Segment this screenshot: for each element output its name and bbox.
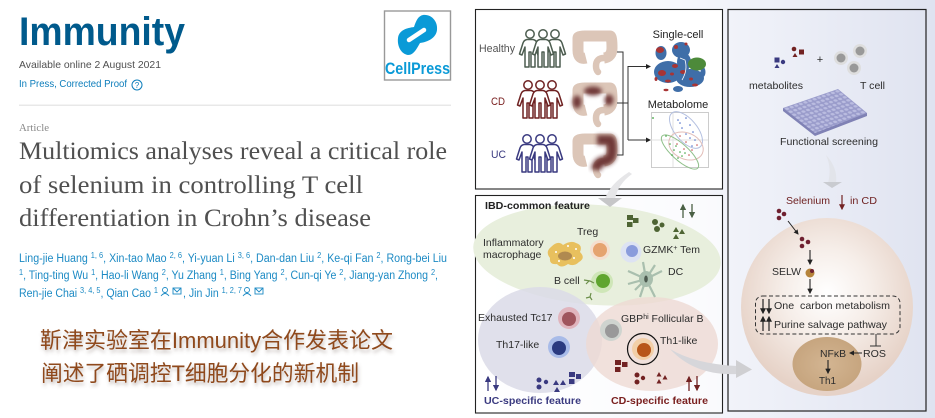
author list: 1, 6 bbox=[91, 251, 104, 260]
cell: Th17-like bbox=[496, 336, 570, 358]
region: IBD-common bbox=[470, 196, 724, 314]
region: UC-specific bbox=[478, 287, 602, 393]
author list: , Jin Jin bbox=[183, 288, 222, 300]
author list: , Jiang-yan Zhong bbox=[343, 270, 431, 282]
author list: 2 bbox=[280, 268, 285, 277]
panel: feature overlap bbox=[470, 196, 724, 413]
label: T cell: T cell bbox=[860, 80, 885, 92]
arrow: Th1 to mechanism bbox=[670, 349, 752, 378]
IBD metabolite symbols bbox=[627, 215, 685, 239]
selenium label: in CD bbox=[850, 195, 877, 207]
well plate bbox=[783, 89, 867, 136]
author list: , Rong-bei Liu bbox=[381, 253, 447, 265]
arrow: screening down bbox=[823, 155, 842, 188]
SELW: SELW bbox=[772, 266, 801, 278]
plus: + bbox=[817, 54, 823, 66]
heading: UC-specific: UC-specific feature bbox=[484, 395, 581, 407]
arrow: SELW down bbox=[809, 279, 811, 293]
arrow: NFkB to Th1 bbox=[827, 360, 829, 373]
Chinese headline bbox=[40, 328, 393, 386]
cell body bbox=[741, 218, 913, 396]
author list: 2, 6 bbox=[170, 251, 182, 260]
CellPress logo: CellPress bbox=[385, 59, 450, 78]
author list: 1 bbox=[220, 268, 224, 277]
selenium label bbox=[786, 195, 877, 209]
ROS: ROS bbox=[863, 348, 886, 360]
cell: inflammatory macrophage bbox=[483, 237, 583, 266]
article header bbox=[19, 10, 186, 90]
metabolic pathways box: Purine salvage pathway bbox=[774, 319, 888, 331]
cell: exhausted Tc17 bbox=[478, 307, 580, 329]
arrow: ROS to NFkB bbox=[850, 352, 862, 354]
bracket arrows bbox=[617, 52, 650, 155]
author list: 3, 4, 5 bbox=[80, 286, 101, 295]
article title: Multiomics analyses reveal a critical role bbox=[19, 138, 447, 165]
region: CD-specific bbox=[586, 297, 718, 391]
cell: Th17-like: Th17-like bbox=[496, 339, 539, 351]
author list: , Cun-qi Ye bbox=[285, 270, 339, 282]
single-cell map bbox=[653, 29, 706, 92]
metabolic pathways box: One carbon metabolism bbox=[774, 300, 890, 312]
author list: , Ke-qi Fan bbox=[321, 253, 376, 265]
nucleus bbox=[792, 337, 862, 391]
cell: dendritic bbox=[628, 262, 684, 297]
metabolite symbols bbox=[774, 47, 804, 68]
cell: Treg: Treg bbox=[577, 226, 598, 238]
author list bbox=[19, 251, 447, 300]
author list: 2 bbox=[339, 268, 344, 277]
cell: GBP follicular B: hi bbox=[643, 314, 649, 321]
selenium entering cell bbox=[777, 209, 810, 264]
SELW bbox=[772, 266, 814, 278]
cell: inflammatory macrophage: Inflammatory bbox=[483, 237, 544, 249]
author list: 1, 2, 7 bbox=[222, 286, 242, 295]
cell: Th1-like: Th1-like bbox=[660, 335, 698, 347]
cell: GZMK Tem: GZMK bbox=[643, 244, 673, 256]
Healthy row: Healthy bbox=[479, 43, 515, 55]
metabolome plot: Metabolome bbox=[648, 99, 708, 111]
UC metabolite symbols bbox=[536, 372, 581, 392]
cell: GZMK Tem: + bbox=[673, 245, 677, 252]
cell: exhausted Tc17: Exhausted Tc17 bbox=[478, 312, 553, 324]
cell: Th1-like bbox=[628, 334, 698, 364]
UC arrows bbox=[488, 376, 496, 391]
status link: In Press, Corrected Proof bbox=[19, 78, 127, 90]
author list: Ren-jie Chai bbox=[19, 288, 82, 300]
inhibition bar bbox=[870, 334, 881, 346]
author list: , Ting-ting Wu bbox=[23, 270, 91, 282]
author list: , Xin-tao Mao bbox=[103, 253, 170, 265]
cell: B cell bbox=[554, 271, 613, 300]
Th1: Th1 bbox=[819, 375, 836, 387]
label: functional screening: Functional screening bbox=[780, 136, 878, 148]
cell: GBP follicular B: GBP bbox=[621, 313, 643, 325]
publication date: Available online 2 August 2021 bbox=[19, 59, 161, 71]
cell: GBP follicular B: Follicular B bbox=[649, 313, 704, 325]
author list: 1 bbox=[154, 286, 159, 295]
author list: 1 bbox=[91, 268, 96, 277]
T cell icons bbox=[834, 44, 867, 75]
single-cell map: Single-cell bbox=[653, 29, 703, 41]
cell: GBP follicular B bbox=[600, 313, 704, 341]
article type: Article bbox=[19, 123, 49, 134]
CD row bbox=[491, 81, 614, 124]
journal title: Immunity bbox=[19, 10, 186, 54]
author list: 2 bbox=[431, 268, 436, 277]
article title: of selenium in controlling T cell bbox=[19, 172, 363, 199]
heading: IBD-common: IBD-common feature bbox=[485, 200, 590, 212]
cell: Treg bbox=[577, 226, 610, 260]
Healthy row bbox=[479, 30, 612, 72]
cell: inflammatory macrophage: macrophage bbox=[483, 249, 542, 261]
metabolome plot bbox=[648, 99, 709, 174]
label: metabolites: metabolites bbox=[749, 80, 803, 92]
NFkB: NFκB bbox=[820, 348, 846, 360]
article title bbox=[19, 138, 447, 232]
CD metabolite symbols bbox=[615, 360, 668, 384]
author list: , Dan-dan Liu bbox=[250, 253, 317, 265]
author list: 1 bbox=[19, 268, 24, 277]
panel: functional screening bbox=[728, 10, 926, 411]
cell: GZMK Tem: Tem bbox=[677, 244, 700, 256]
heading: CD-specific: CD-specific feature bbox=[611, 395, 708, 407]
cell: B cell: B cell bbox=[554, 275, 580, 287]
icon: help bbox=[132, 80, 142, 90]
CD arrows bbox=[689, 376, 697, 391]
Chinese headline: 阐述了硒调控T细胞分化的新机制 bbox=[41, 361, 359, 386]
author list: , Hao-li Wang bbox=[95, 270, 162, 282]
cell: GZMK Tem bbox=[620, 242, 700, 262]
UC row bbox=[491, 135, 612, 175]
arrow: cohorts to features bbox=[598, 172, 632, 207]
panel: patient cohorts bbox=[476, 10, 722, 189]
Chinese headline: 靳津实验室在Immunity合作发表论文 bbox=[40, 328, 393, 353]
author list: 2 bbox=[317, 251, 322, 260]
cell: dendritic: DC bbox=[668, 266, 684, 278]
author list: , Yu Zhang bbox=[166, 270, 220, 282]
author list: 2 bbox=[376, 251, 381, 260]
author list: 2 bbox=[162, 268, 166, 277]
author list: , Bing Yang bbox=[224, 270, 280, 282]
author list: Ling-jie Huang bbox=[19, 253, 93, 265]
icon: help: ? bbox=[135, 81, 140, 90]
author list: , bbox=[435, 270, 438, 282]
UC row: UC bbox=[491, 149, 506, 161]
author list: , Qian Cao bbox=[100, 288, 154, 300]
IBD up and down arrows bbox=[683, 204, 692, 218]
metabolic pathways box bbox=[756, 296, 900, 334]
author list: , Yi-yuan Li bbox=[182, 253, 238, 265]
article title: differentiation in Crohn’s disease bbox=[19, 205, 371, 232]
CD row: CD bbox=[491, 96, 505, 108]
author list: 3, 6 bbox=[238, 251, 251, 260]
selenium label: Selenium bbox=[786, 195, 830, 207]
CellPress logo bbox=[384, 11, 450, 80]
